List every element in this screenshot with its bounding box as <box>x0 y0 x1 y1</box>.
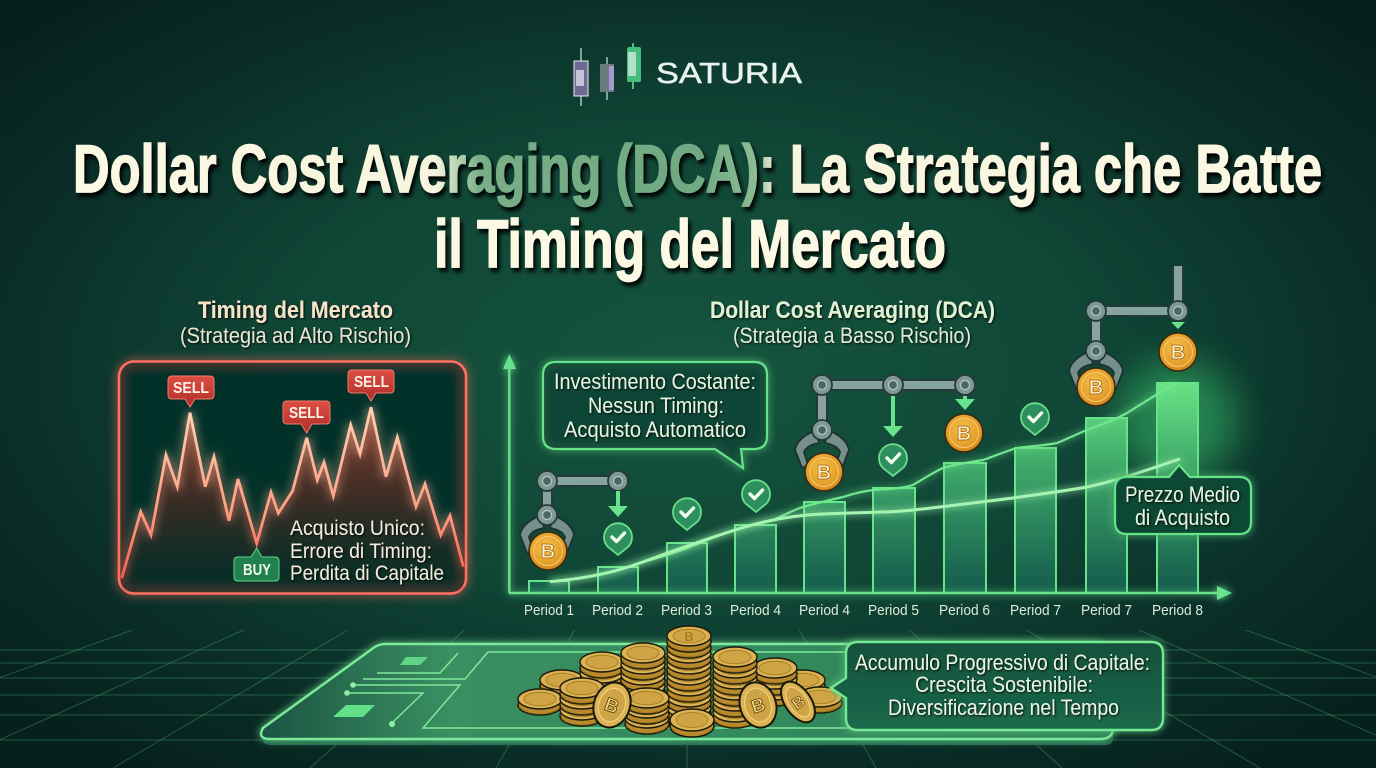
arrow <box>963 396 967 402</box>
text: single purchase note: Acquisto Unico: <box>290 517 425 540</box>
upright coin left: B <box>601 694 622 719</box>
heading: dollar cost averaging: (Strategia a Basso Rischio) <box>733 323 971 348</box>
platform: circuit board <box>261 644 1113 745</box>
arrow <box>616 491 620 509</box>
check marker 5 <box>1021 403 1049 435</box>
flat front coin <box>670 709 714 737</box>
callout: investimento costante: Investimento Costante: <box>554 369 756 394</box>
coin pile <box>518 626 842 737</box>
period labels <box>524 602 1203 619</box>
callout: accumulo progressivo <box>831 642 1163 730</box>
tilted coin: B <box>789 693 808 714</box>
sell tag 2: SELL <box>289 405 324 422</box>
check marker 4 <box>879 444 907 476</box>
period labels: Period 7 <box>1010 602 1061 619</box>
robot arm 3 <box>1069 266 1197 406</box>
period labels: Period 2 <box>592 602 643 619</box>
callout: accumulo progressivo: Accumulo Progressivo di Capitale: <box>855 650 1150 675</box>
callout: investimento costante: Nessun Timing: <box>588 393 724 418</box>
title <box>73 131 1322 282</box>
text: single purchase note <box>290 517 444 585</box>
wordmark: SATURIA <box>656 58 803 90</box>
buy tag <box>234 548 279 581</box>
icon: candlesticks <box>574 43 641 106</box>
text: single purchase note: Errore di Timing: <box>290 540 432 563</box>
panel: timing del mercato <box>119 362 466 594</box>
tallest stack <box>667 626 711 724</box>
chart: DCA bars <box>529 383 1198 593</box>
tilted coin <box>774 676 822 728</box>
sell tag 1 <box>168 376 214 407</box>
tallest stack: B <box>684 629 694 644</box>
check marker 1 <box>604 523 632 555</box>
bitcoin coin: B <box>957 423 971 445</box>
callout: accumulo progressivo: Diversificazione nel Tempo <box>888 695 1119 720</box>
heading: dollar cost averaging <box>710 297 995 348</box>
logo: Saturia <box>574 43 803 106</box>
period labels: Period 6 <box>939 602 990 619</box>
callout: prezzo medio di acquisto: di Acquisto <box>1135 505 1230 530</box>
period labels: Period 7 <box>1081 602 1132 619</box>
callout: investimento costante <box>543 362 767 468</box>
text: single purchase note: Perdita di Capitale <box>290 562 444 585</box>
check marker 2 <box>673 498 701 530</box>
coin: B <box>1089 377 1103 399</box>
upright coin right <box>734 678 782 732</box>
arrow <box>1171 322 1185 329</box>
period labels: Period 4 <box>730 602 781 619</box>
sell tag 3: SELL <box>354 374 389 391</box>
coin: B <box>541 541 555 563</box>
heading: timing del mercato: (Strategia ad Alto Rischio) <box>180 323 411 348</box>
heading: dollar cost averaging: Dollar Cost Averaging (DCA) <box>710 297 995 324</box>
volatile price line <box>122 407 463 578</box>
coin <box>805 453 843 491</box>
back stacks <box>540 643 825 713</box>
sell tag 1: SELL <box>173 380 209 397</box>
callout: prezzo medio di acquisto <box>1115 465 1251 534</box>
callout: prezzo medio di acquisto: Prezzo Medio <box>1125 482 1240 507</box>
callout: accumulo progressivo: Crescita Sostenibile: <box>915 672 1093 697</box>
average purchase price line <box>550 459 1180 582</box>
price trend line <box>550 383 1177 582</box>
coin: B <box>1171 342 1185 364</box>
area under price line <box>122 407 463 592</box>
right stack <box>713 647 757 728</box>
period labels: Period 4 <box>799 602 850 619</box>
bitcoin coin <box>945 414 983 452</box>
arrow <box>891 396 895 429</box>
buy tag: BUY <box>243 562 271 579</box>
coin: B <box>817 462 831 484</box>
circuit chips <box>400 657 428 665</box>
glow behind tallest bar <box>1118 360 1238 480</box>
period labels: Period 5 <box>868 602 919 619</box>
period labels: Period 3 <box>661 602 712 619</box>
check marker 3 <box>742 480 770 512</box>
callout: investimento costante: Acquisto Automatico <box>564 417 746 442</box>
axes <box>503 354 1232 600</box>
upright coin right: B <box>749 694 768 719</box>
title: il Timing del Mercato <box>434 206 946 282</box>
heading: timing del mercato: Timing del Mercato <box>198 297 393 324</box>
period labels: Period 1 <box>524 602 574 619</box>
heading: timing del mercato <box>180 297 411 348</box>
robot arm 1 <box>520 471 628 570</box>
panel frame <box>119 362 466 594</box>
circuit traces <box>347 652 860 728</box>
floor grid <box>0 630 1376 768</box>
robot arm 2 <box>795 375 975 491</box>
upright coin left <box>587 677 637 733</box>
period labels: Period 8 <box>1152 602 1203 619</box>
sell tag 2 <box>283 401 330 433</box>
sell tag 3 <box>348 370 394 401</box>
front stacks <box>518 678 842 734</box>
